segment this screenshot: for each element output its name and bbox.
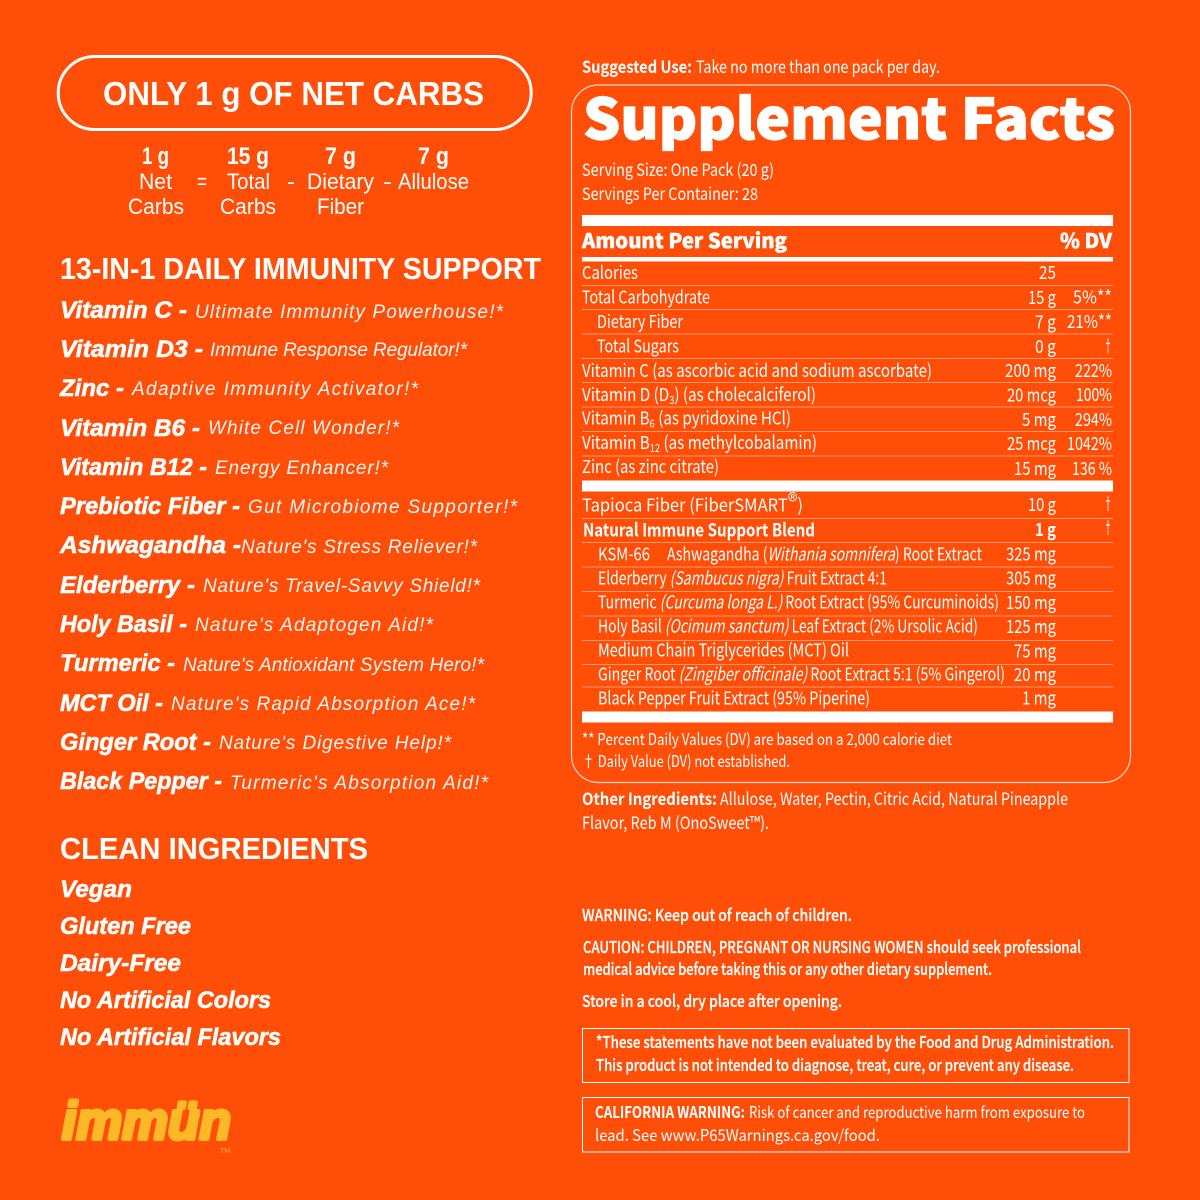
heading: clean ingredients: CLEAN INGREDIENTS <box>60 831 368 866</box>
net carbs equation <box>128 143 469 219</box>
blend rows: 10 g <box>1028 491 1056 517</box>
list: 13 ingredients: Ginger Root - <box>60 729 211 756</box>
nutrient rows: 222% <box>1075 357 1112 383</box>
heading: daily immunity support: 13-IN-1 DAILY IMMUNITY SUPPORT <box>60 251 541 286</box>
footnotes: ** Percent Daily Values (DV) are based on a 2,000 calorie diet <box>582 726 952 750</box>
nutrient rows: 3 <box>669 392 674 408</box>
table header: Amount Per Serving <box>581 225 787 254</box>
blend rows: Elderberry (Sambucus nigra) Fruit Extract 4:1 <box>598 564 887 590</box>
net carbs equation: Carbs <box>220 194 276 219</box>
list: 13 ingredients: Adaptive Immunity Activator!* <box>131 379 419 400</box>
list: 13 ingredients: Prebiotic Fiber - <box>60 493 240 520</box>
nutrient rows: † <box>1104 332 1112 358</box>
nutrient rows: 21%** <box>1067 308 1112 334</box>
nutrient rows: 5 mg <box>1022 406 1056 432</box>
nutrient rows: 5%** <box>1073 284 1112 310</box>
list: 13 ingredients: Elderberry - <box>60 572 195 599</box>
list: 13 ingredients: MCT Oil - <box>60 690 163 717</box>
California warning box <box>582 1098 1129 1152</box>
list: 13 ingredients <box>59 297 518 795</box>
badge: only 1 g of net carbs <box>58 56 531 130</box>
warnings: medical advice before taking this or any other dietary supplement. <box>583 956 992 980</box>
serving info: Servings Per Container: 28 <box>582 180 758 205</box>
list: 13 ingredients: Turmeric - <box>60 650 175 677</box>
net carbs equation: Fiber <box>317 194 364 219</box>
net carbs equation: 7 g <box>325 143 356 170</box>
list: 13 ingredients: Nature's Antioxidant System Hero!* <box>183 655 485 676</box>
nutrient rows: Total Carbohydrate <box>582 284 710 310</box>
nutrient rows <box>582 259 1113 481</box>
California warning box: CALIFORNIA WARNING: <box>595 1099 745 1123</box>
nutrient rows: 12 <box>650 440 660 456</box>
panel: net carbs <box>58 56 531 219</box>
blend rows: 1 mg <box>1022 684 1056 710</box>
list: 13 ingredients: Ultimate Immunity Powerhouse!* <box>195 302 504 323</box>
nutrient rows: Total Sugars <box>597 332 679 358</box>
list: 13 ingredients: Vitamin B12 - <box>60 454 207 481</box>
nutrient rows: Vitamin B <box>582 404 662 430</box>
FDA disclaimer box: This product is not intended to diagnose, treat, cure, or prevent any disease. <box>596 1052 1074 1076</box>
blend rows: 125 mg <box>1006 613 1056 639</box>
other ingredients: Flavor, Reb M (OnoSweet™). <box>582 809 769 834</box>
list: 13 ingredients: Nature's Adaptogen Aid!* <box>195 615 434 636</box>
blend rows <box>582 484 1113 710</box>
logo: immün: TM <box>220 1148 230 1155</box>
footnotes: † Daily Value (DV) not established. <box>582 748 790 772</box>
nutrient rows: Vitamin B <box>582 429 662 455</box>
nutrient rows: (as methylcobalamin) <box>660 429 817 455</box>
list: 13 ingredients: Turmeric's Absorption Aid!* <box>230 773 489 794</box>
suggested use <box>582 53 940 78</box>
list: clean ingredients: Gluten Free <box>60 913 191 940</box>
logo: immün: immün <box>62 1092 231 1151</box>
nutrient rows: 100% <box>1076 381 1112 407</box>
warnings: CAUTION: CHILDREN, PREGNANT OR NURSING WOMEN should seek professional <box>583 934 1081 958</box>
list: 13 ingredients: Vitamin B6 - <box>60 415 200 442</box>
blend rows: Medium Chain Triglycerides (MCT) Oil <box>598 636 849 662</box>
list: 13 ingredients: Immune Response Regulator!* <box>210 340 468 361</box>
net carbs equation: - <box>287 169 295 194</box>
serving info: Serving Size: One Pack (20 g) <box>582 156 774 181</box>
nutrient rows: Vitamin C (as ascorbic acid and sodium ascorbate) <box>582 357 932 383</box>
nutrient rows: (as pyridoxine HCl) <box>655 404 791 430</box>
list: 13 ingredients: Energy Enhancer!* <box>215 458 389 479</box>
blend rows: Holy Basil (Ocimum sanctum) Leaf Extract (2% Ursolic Acid) <box>598 612 978 638</box>
warnings: Store in a cool, dry place after opening. <box>582 988 842 1012</box>
nutrient rows: 25 <box>1039 259 1056 285</box>
net carbs equation: - <box>383 169 392 194</box>
nutrient rows: 294% <box>1075 406 1112 432</box>
California warning box: lead. See www.P65Warnings.ca.gov/food. <box>595 1122 880 1146</box>
nutrient rows: 1042% <box>1067 430 1112 456</box>
list: clean ingredients <box>60 876 281 1051</box>
list: 13 ingredients: Zinc - <box>59 375 124 402</box>
list: 13 ingredients: Nature's Travel-Savvy Shield!* <box>203 576 481 597</box>
blend rows: † <box>1104 514 1112 540</box>
list: 13 ingredients: Vitamin D3 - <box>60 336 203 363</box>
footnotes <box>582 726 952 772</box>
blend rows: ) <box>797 492 803 518</box>
net carbs equation: 15 g <box>227 143 269 170</box>
list: 13 ingredients: Holy Basil - <box>60 611 187 638</box>
net carbs equation: Total <box>227 169 270 194</box>
list: clean ingredients: Dairy-Free <box>60 950 181 977</box>
nutrient rows: Vitamin D (D <box>582 381 685 407</box>
blend rows: 75 mg <box>1014 638 1056 664</box>
nutrient rows: 15 g <box>1028 284 1056 310</box>
nutrient rows: 25 mcg <box>1007 430 1056 456</box>
blend rows: Ginger Root (Zingiber officinale) Root Extract 5:1 (5% Gingerol) <box>598 660 1005 686</box>
net carbs equation: = <box>197 169 207 194</box>
net carbs equation: Dietary <box>307 169 374 194</box>
panel: supplement facts <box>572 75 1130 782</box>
nutrient rows: 7 g <box>1035 308 1056 334</box>
nutrient rows: ) (as cholecalciferol) <box>674 381 816 407</box>
badge: only 1 g of net carbs: ONLY 1 g OF NET CARBS <box>103 75 484 112</box>
warnings <box>582 902 1081 1012</box>
California warning box: Risk of cancer and reproductive harm from exposure to <box>749 1099 1085 1123</box>
blend rows: 1 g <box>1035 516 1056 542</box>
suggested use: Suggested Use: <box>582 53 692 78</box>
blend rows: Ashwagandha (Withania somnifera) Root Extract <box>667 540 982 566</box>
blend rows: Natural Immune Support Blend <box>583 516 815 542</box>
nutrient rows: Dietary Fiber <box>597 308 684 334</box>
net carbs equation: 1 g <box>142 143 169 170</box>
net carbs equation: Allulose <box>398 169 469 194</box>
table header <box>581 225 1113 254</box>
other ingredients: Other Ingredients: <box>582 785 717 810</box>
blend rows: 150 mg <box>1006 589 1056 615</box>
nutrient rows: 136 % <box>1072 455 1112 481</box>
blend rows: ® <box>788 484 797 516</box>
table header: % DV <box>1060 225 1113 254</box>
nutrient rows: 15 mg <box>1014 455 1056 481</box>
blend rows: 20 mg <box>1014 661 1056 687</box>
list: 13 ingredients: Vitamin C - <box>60 297 187 324</box>
other ingredients <box>582 785 1068 834</box>
nutrient rows: Zinc (as zinc citrate) <box>582 453 719 479</box>
nutrient rows: 0 g <box>1035 333 1056 359</box>
blend rows: Black Pepper Fruit Extract (95% Piperine) <box>598 684 870 710</box>
nutrient rows: 20 mcg <box>1007 382 1056 408</box>
list: 13 ingredients: Ashwagandha - <box>59 532 241 559</box>
serving info <box>582 156 774 205</box>
list: 13 ingredients: Nature's Digestive Help!* <box>219 733 452 754</box>
blend rows: † <box>1104 490 1112 516</box>
blend rows: 325 mg <box>1006 540 1056 566</box>
blend rows: 305 mg <box>1006 564 1056 590</box>
suggested use: Take no more than one pack per day. <box>696 53 940 78</box>
list: 13 ingredients: Nature's Stress Reliever!* <box>241 537 478 558</box>
list: clean ingredients: No Artificial Colors <box>60 987 271 1014</box>
list: 13 ingredients: Gut Microbiome Supporter!* <box>248 497 518 518</box>
net carbs equation: 7 g <box>418 143 449 170</box>
nutrient rows: 200 mg <box>1005 357 1056 383</box>
warnings: WARNING: Keep out of reach of children. <box>582 902 852 926</box>
list: 13 ingredients: Black Pepper - <box>60 768 222 795</box>
other ingredients: Allulose, Water, Pectin, Citric Acid, Natural Pineapple <box>720 785 1068 810</box>
nutrient rows: Calories <box>582 259 638 285</box>
list: 13 ingredients: Nature's Rapid Absorption Ace!* <box>171 694 476 715</box>
blend rows: KSM-66 <box>598 540 650 566</box>
list: clean ingredients: No Artificial Flavors <box>60 1024 281 1051</box>
blend rows: Turmeric (Curcuma longa L.) Root Extract (95% Curcuminoids) <box>598 588 999 614</box>
list: clean ingredients: Vegan <box>60 876 132 903</box>
supplement facts title: Supplement Facts <box>583 75 1115 156</box>
net carbs equation: Carbs <box>128 194 184 219</box>
nutrient rows: 6 <box>650 416 655 432</box>
net carbs equation: Net <box>139 169 172 194</box>
FDA disclaimer box <box>582 1028 1129 1082</box>
blend rows: Tapioca Fiber (FiberSMART <box>582 492 806 518</box>
list: 13 ingredients: White Cell Wonder!* <box>208 418 400 439</box>
